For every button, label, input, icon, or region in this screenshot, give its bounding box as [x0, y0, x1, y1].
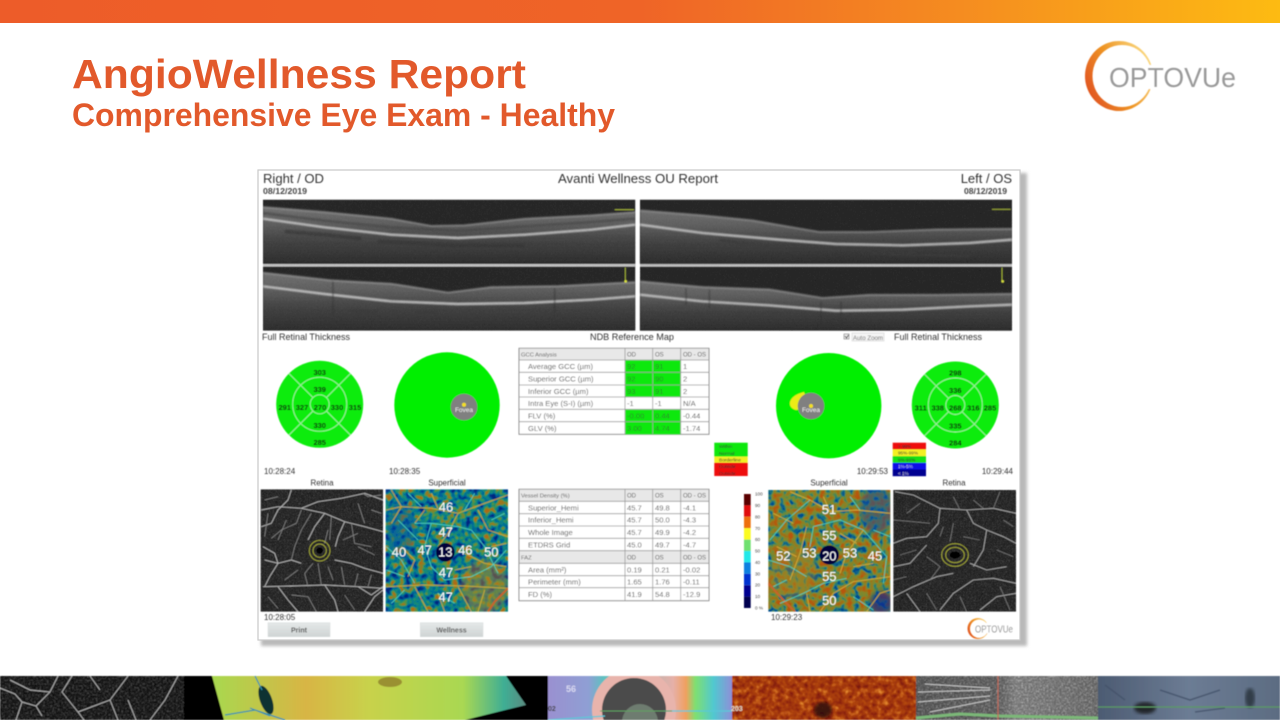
vessel density and FAZ table: OD - OS	[683, 494, 706, 500]
thickness grid OD: 330	[313, 421, 326, 430]
control: auto zoom	[844, 333, 884, 342]
legend: NDB status	[714, 443, 748, 477]
vessel density and FAZ table: OD	[627, 556, 637, 562]
GCC analysis table: FLV (%)	[528, 412, 556, 420]
button: print	[268, 623, 330, 637]
vessel density and FAZ table: OD	[627, 494, 637, 500]
vessel density and FAZ table: 45.7	[627, 528, 642, 537]
angiogram: superficial OD with density values: 46	[458, 542, 473, 558]
legend: percentile: 1%-5%	[898, 464, 913, 469]
thickness grid OS: 336	[949, 386, 962, 395]
vessel density and FAZ table: FAZ	[521, 556, 532, 562]
vessel density and FAZ table: ETDRS Grid	[528, 540, 570, 550]
timestamps and map labels: 10:29:53	[857, 467, 889, 476]
header: left eye: 08/12/2019	[964, 187, 1008, 196]
angiogram: superficial OD with density values: 47	[417, 542, 432, 558]
angiogram: superficial OS with density values: 51	[822, 502, 836, 517]
button: wellness: Wellness	[436, 628, 467, 634]
vessel density and FAZ table: 41.9	[627, 590, 642, 599]
small logo: Optovue: OPTOVUe	[975, 624, 1013, 636]
strip image: macular thickness map: 02	[548, 706, 556, 713]
GCC analysis table: 92	[627, 374, 635, 384]
small logo: Optovue	[968, 618, 1013, 639]
legend: NDB status: Within	[719, 444, 733, 450]
thickness grid OD: 339	[313, 385, 326, 394]
GCC analysis table: 3.00	[627, 424, 642, 433]
thickness grid OS: 316	[967, 404, 980, 412]
thickness grid OD: 327	[296, 403, 308, 412]
image strip	[0, 675, 1280, 720]
NDB map OS: Fovea	[802, 407, 820, 414]
angiogram: superficial OS with density values: 53	[802, 546, 817, 560]
thickness grid OS: 335	[949, 422, 962, 430]
thickness grid OD	[276, 361, 363, 448]
timestamps and map labels: 10:28:24	[264, 467, 296, 476]
vessel density and FAZ table: Superior_Hemi	[528, 504, 579, 512]
header: right eye	[263, 171, 324, 196]
legend: NDB status: Outside	[719, 471, 736, 477]
GCC analysis table: OD	[627, 352, 637, 358]
GCC analysis table: -1	[655, 399, 662, 408]
vessel density and FAZ table	[519, 489, 709, 601]
vessel density and FAZ table: -4.2	[683, 528, 696, 537]
GCC analysis table: 0.44	[655, 412, 670, 420]
vessel density and FAZ table: 49.9	[655, 528, 670, 537]
vessel density and FAZ table: 0.21	[655, 566, 670, 574]
OCT scans: left eye	[640, 200, 1012, 331]
top gradient bar	[0, 0, 1280, 23]
color scale bar: 30	[755, 572, 761, 576]
color scale bar: 80	[755, 514, 761, 520]
angiogram: superficial OS with density values: 55	[822, 528, 837, 543]
thickness grid OS: 268	[949, 404, 962, 412]
strip image: retinal angiogram	[0, 676, 184, 720]
header: report title: Avanti Wellness OU Report	[558, 171, 718, 186]
header: right eye: 08/12/2019	[263, 187, 308, 196]
NDB map OD: Fovea	[455, 407, 473, 414]
timestamps and map labels	[264, 467, 1014, 622]
legend: percentile: > 99%	[898, 444, 911, 449]
angiogram: retina OS	[893, 490, 1016, 612]
color scale bar	[744, 492, 763, 610]
vessel density and FAZ table: Inferior_Hemi	[528, 516, 574, 524]
vessel density and FAZ table: OS	[655, 556, 664, 562]
angiogram: superficial OS with density values: 53	[843, 546, 857, 560]
angiogram: superficial OS with density values: 50	[822, 593, 837, 608]
logo: Optovue	[1085, 41, 1236, 111]
angiogram: superficial OD with density values	[386, 489, 508, 613]
timestamps and map labels: Retina	[942, 478, 966, 488]
vessel density and FAZ table: Area (mm²)	[528, 566, 567, 574]
legend: percentile: < 1%	[898, 471, 909, 476]
GCC analysis table: -1.74	[683, 424, 700, 433]
color scale bar: 50	[755, 548, 761, 554]
header: left eye	[961, 171, 1012, 196]
angiogram: superficial OS with density values: 20	[822, 548, 837, 564]
timestamps and map labels: Retina	[310, 478, 334, 488]
strip image: macular thickness map	[547, 675, 733, 720]
vessel density and FAZ table: 50.0	[655, 516, 670, 524]
GCC analysis table: Inferior GCC (µm)	[528, 387, 589, 396]
legend: percentile	[893, 443, 926, 476]
timestamps and map labels: Superficial	[428, 478, 466, 488]
thickness grid OD: 291	[278, 403, 291, 412]
timestamps and map labels: Superficial	[810, 478, 848, 488]
strip image: en-face red map: 203	[731, 706, 743, 713]
GCC analysis table: 93	[627, 387, 635, 396]
angiogram: superficial OD with density values: 50	[484, 544, 499, 560]
GCC analysis table: -0.44	[683, 412, 700, 420]
vessel density and FAZ table: 54.8	[655, 590, 670, 599]
GCC analysis table: 1	[683, 362, 687, 371]
GCC analysis table: 91	[655, 362, 663, 371]
vessel density and FAZ table: FD (%)	[528, 590, 553, 599]
legend: NDB status: Outside	[719, 464, 736, 470]
GCC analysis table: -1	[627, 399, 634, 408]
GCC analysis table: 91	[655, 387, 663, 396]
GCC analysis table: Average GCC (µm)	[528, 362, 593, 371]
legend: percentile: 5%-95%	[898, 458, 915, 462]
vessel density and FAZ table: OD - OS	[683, 556, 706, 562]
vessel density and FAZ table: 45.7	[627, 504, 642, 512]
GCC analysis table: GCC Analysis	[521, 352, 557, 358]
angiogram: superficial OS with density values: 55	[822, 569, 837, 584]
vessel density and FAZ table: -12.9	[683, 590, 700, 599]
GCC analysis table: 4.74	[655, 424, 670, 433]
vessel density and FAZ table: -0.11	[683, 578, 700, 586]
GCC analysis table: 90	[655, 374, 663, 384]
NDB map OD	[394, 352, 500, 458]
subtitle: Comprehensive Eye Exam - Healthy	[72, 97, 615, 133]
GCC analysis table: GLV (%)	[528, 424, 557, 433]
control: auto zoom: Auto Zoom	[853, 335, 883, 342]
angiogram: superficial OD with density values: 47	[439, 565, 453, 580]
legend: NDB status: Borderline	[719, 458, 741, 464]
label: NDB reference map: NDB Reference Map	[590, 332, 674, 342]
OCT scans: right eye	[263, 200, 635, 331]
color scale bar: 10	[755, 594, 761, 599]
thickness grid OS: 298	[949, 368, 962, 378]
GCC analysis table: -0.00	[627, 412, 644, 420]
label: full retinal thickness OD: Full Retinal Thickness	[262, 332, 350, 342]
timestamps and map labels: 10:29:44	[982, 467, 1014, 476]
color scale bar: 20	[755, 582, 761, 588]
logo: Optovue: OPTOVUe	[1109, 62, 1236, 93]
label: full retinal thickness OS: Full Retinal Thickness	[894, 332, 982, 342]
GCC analysis table: 2	[683, 374, 687, 384]
color scale bar: 60	[755, 537, 761, 542]
button: print: Print	[291, 628, 308, 634]
NDB map OS	[776, 353, 881, 458]
thickness grid OS	[912, 362, 999, 448]
color scale bar: 100	[755, 492, 763, 496]
legend: percentile: 95%-99%	[898, 450, 918, 456]
header: left eye: Left / OS	[961, 171, 1012, 186]
thickness grid OS: 311	[915, 404, 927, 412]
timestamps and map labels: 10:28:35	[389, 467, 421, 476]
strip image: en-face red map	[731, 676, 916, 720]
thickness grid OD: 303	[313, 368, 326, 377]
GCC analysis table: 92	[627, 362, 635, 371]
timestamps and map labels: 10:29:23	[771, 613, 803, 622]
color scale bar: 40	[755, 560, 761, 565]
color scale bar: 0 %	[755, 606, 763, 610]
GCC analysis table: Intra Eye (S-I) (µm)	[528, 399, 594, 408]
thickness grid OD: 330	[331, 403, 343, 412]
GCC analysis table: OS	[655, 352, 664, 358]
strip image: macular thickness map: 56	[566, 684, 576, 694]
GCC analysis table: 2	[683, 387, 687, 396]
angiogram: superficial OD with density values: 47	[438, 590, 453, 604]
angiogram: superficial OS with density values: 52	[776, 548, 791, 564]
angiogram: superficial OD with density values: 47	[438, 524, 453, 540]
thickness grid OS: 338	[931, 404, 944, 412]
vessel density and FAZ table: -4.3	[683, 516, 696, 524]
timestamps and map labels: 10:28:05	[264, 613, 296, 622]
vessel density and FAZ table: 1.76	[655, 578, 670, 586]
vessel density and FAZ table: 1.65	[627, 578, 642, 586]
angiogram: superficial OD with density values: 13	[438, 544, 453, 560]
GCC analysis table: OD - OS	[683, 352, 706, 358]
thickness grid OD: 285	[313, 438, 326, 447]
thickness grid OS: 284	[949, 438, 962, 448]
vessel density and FAZ table: 45.0	[627, 540, 642, 550]
angiogram: superficial OD with density values: 46	[439, 500, 453, 514]
header: right eye: Right / OD	[263, 171, 324, 186]
color scale bar: 90	[755, 503, 761, 508]
legend: NDB status: Normal	[719, 451, 734, 457]
title: AngioWellness Report	[72, 51, 526, 97]
vessel density and FAZ table: 49.7	[655, 540, 670, 550]
thickness grid OS: 285	[984, 404, 996, 412]
vessel density and FAZ table: 49.8	[655, 504, 670, 512]
vessel density and FAZ table: 45.7	[627, 516, 642, 524]
GCC analysis table: N/A	[683, 399, 697, 408]
vessel density and FAZ table: -4.7	[683, 540, 696, 550]
vessel density and FAZ table: -0.02	[683, 566, 700, 574]
panel: report screenshot	[258, 170, 1027, 646]
angiogram: superficial OS with density values: 45	[868, 548, 882, 564]
strip image: 3D thickness map	[184, 676, 548, 720]
vessel density and FAZ table: Perimeter (mm)	[528, 578, 581, 586]
GCC analysis table: Superior GCC (µm)	[528, 374, 594, 384]
button: wellness	[420, 623, 483, 637]
vessel density and FAZ table: OS	[655, 494, 664, 500]
strip image: blue-gray fundus	[1098, 676, 1280, 720]
strip image: grayscale fundus	[916, 676, 1098, 720]
vessel density and FAZ table: Vessel Density (%)	[521, 494, 570, 500]
angiogram: superficial OD with density values: 40	[392, 544, 406, 560]
angiogram: retina OD	[261, 489, 383, 612]
vessel density and FAZ table: Whole Image	[528, 528, 573, 537]
angiogram: superficial OS with density values	[768, 487, 893, 615]
color scale bar: 70	[755, 526, 761, 531]
vessel density and FAZ table: -4.1	[683, 504, 696, 512]
vessel density and FAZ table: 0.19	[627, 566, 642, 574]
thickness grid OD: 270	[314, 403, 326, 412]
thickness grid OD: 315	[349, 403, 361, 412]
GCC analysis table	[519, 348, 709, 434]
